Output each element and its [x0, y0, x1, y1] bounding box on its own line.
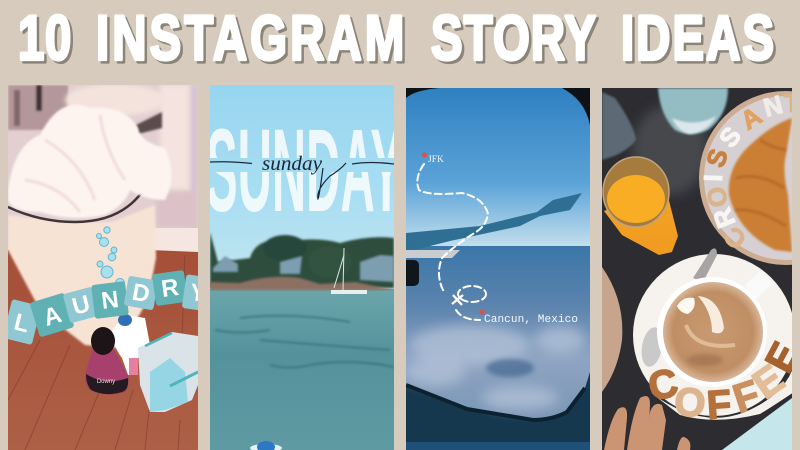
- wood floor: [8, 250, 198, 450]
- sticker: CROISSANT letters: R: [706, 203, 741, 232]
- title: IDEAS: [621, 3, 774, 73]
- detergent bottle: [112, 314, 150, 375]
- blue buoy: [250, 441, 282, 450]
- baseboard: [155, 228, 198, 252]
- title: INSTAGRAM: [98, 5, 407, 76]
- orange juice glass: [603, 157, 678, 255]
- sticker: LAUNDRY tiles: R: [160, 274, 181, 303]
- latte art: [677, 296, 735, 366]
- blue cloth: [722, 398, 792, 450]
- lower frame highlight: [406, 442, 590, 450]
- dashed flight path: [417, 164, 488, 320]
- JFK pin and label: JFK: [428, 155, 444, 165]
- sticker: CROISSANT letters: S: [713, 121, 747, 153]
- window frame: [406, 372, 590, 442]
- sticker: COFFEE letters: F: [705, 382, 733, 428]
- plastic container: [138, 332, 198, 412]
- plate inner: [704, 96, 800, 260]
- tree line: [210, 232, 394, 288]
- small tumbler: [602, 92, 636, 160]
- cup handle: [745, 270, 772, 300]
- water glass: [658, 88, 728, 134]
- sticker: LAUNDRY tiles: Y: [188, 279, 208, 308]
- water glass reflection: [672, 116, 716, 134]
- sticker: CROISSANT letters: N: [760, 89, 786, 123]
- fabric softener bottle: Downy: [97, 379, 115, 385]
- sky: [210, 85, 394, 290]
- JFK pin and label: [422, 152, 444, 165]
- sunday script with lines: sunday: [262, 153, 322, 175]
- dark window blinds: [8, 85, 68, 130]
- panel: breakfast story: [602, 88, 800, 450]
- sticker: COFFEE letters: E: [745, 356, 792, 407]
- dark frame corner: [406, 88, 590, 125]
- infographic canvas: SUNDAY: [206, 105, 402, 237]
- towel folds: [25, 115, 125, 212]
- pillow: [65, 84, 165, 116]
- croissant plate: [699, 91, 800, 265]
- sticker: CROISSANT letters: [698, 88, 800, 255]
- sticker: COFFEE letters: C: [645, 360, 682, 410]
- sticker: CROISSANT letters: A: [735, 100, 767, 136]
- coffee cup: [657, 277, 767, 387]
- sunday script with lines: [210, 153, 394, 199]
- SUNDAY cut-out lettering: [210, 128, 394, 212]
- sticker: LAUNDRY tiles: L: [11, 309, 32, 338]
- fabric softener bottle: [85, 327, 129, 395]
- dark shelf: [136, 112, 162, 134]
- title: INSTAGRAM: [96, 3, 404, 73]
- table highlight: [632, 105, 708, 195]
- title: IDEAS: [624, 5, 776, 76]
- hand fingers: [604, 396, 690, 450]
- sticker: LAUNDRY tiles: D: [130, 279, 152, 308]
- infographic canvas: SUNDAY: [206, 105, 402, 237]
- title: 10: [20, 5, 74, 76]
- title: [18, 3, 776, 76]
- Cancun pin and label: [479, 309, 578, 326]
- title: STORY: [434, 5, 598, 76]
- sticker: LAUNDRY tiles: N: [100, 286, 120, 315]
- dark cloud shadow: [486, 359, 534, 377]
- basket rim: [8, 192, 142, 222]
- sticker: CROISSANT letters: S: [700, 145, 734, 171]
- panel: sunday story: [206, 85, 402, 450]
- panel: travel story: [400, 88, 590, 450]
- sky: [406, 88, 590, 246]
- sticker: LAUNDRY tiles: [8, 270, 198, 344]
- coffee surface: [663, 282, 763, 382]
- sailboat: [331, 248, 367, 294]
- title: STORY: [431, 3, 596, 73]
- sticker: COFFEE letters: O: [673, 380, 707, 426]
- sticker: CROISSANT letters: O: [701, 185, 733, 209]
- sticker: COFFEE letters: [645, 335, 800, 428]
- wall: [8, 85, 198, 255]
- X mark: [452, 295, 463, 305]
- sticker: CROISSANT letters: C: [718, 220, 752, 255]
- Cancun pin and label: Cancun, Mexico: [484, 314, 578, 326]
- sticker: CROISSANT letters: I: [698, 174, 728, 182]
- left plate edge: [602, 267, 622, 392]
- white towels: [8, 105, 172, 218]
- sea and clouds: [406, 246, 590, 419]
- spoon: [639, 248, 717, 368]
- rocky shore: [210, 277, 394, 290]
- water: [210, 289, 394, 450]
- croissant: [729, 118, 792, 252]
- door frame: [156, 85, 198, 230]
- window bottom rim: [406, 385, 585, 420]
- saucer: [633, 254, 795, 416]
- cloud layers: [405, 325, 585, 410]
- croissant ridges: [735, 140, 786, 226]
- water ripples: [215, 316, 394, 368]
- soap bubbles: [96, 227, 124, 288]
- laundry basket: [8, 205, 156, 348]
- houses: [213, 255, 394, 282]
- sticker: LAUNDRY tiles: A: [40, 301, 65, 332]
- dark table: [602, 88, 792, 450]
- sticker: CROISSANT letters: T: [784, 88, 800, 118]
- sticker: COFFEE backing: [650, 365, 794, 420]
- airplane wing: [400, 193, 582, 286]
- title: 10: [18, 3, 71, 73]
- sticker: COFFEE letters: F: [728, 372, 765, 422]
- sticker: LAUNDRY tiles: U: [69, 290, 93, 321]
- panel: laundry story: [8, 85, 198, 450]
